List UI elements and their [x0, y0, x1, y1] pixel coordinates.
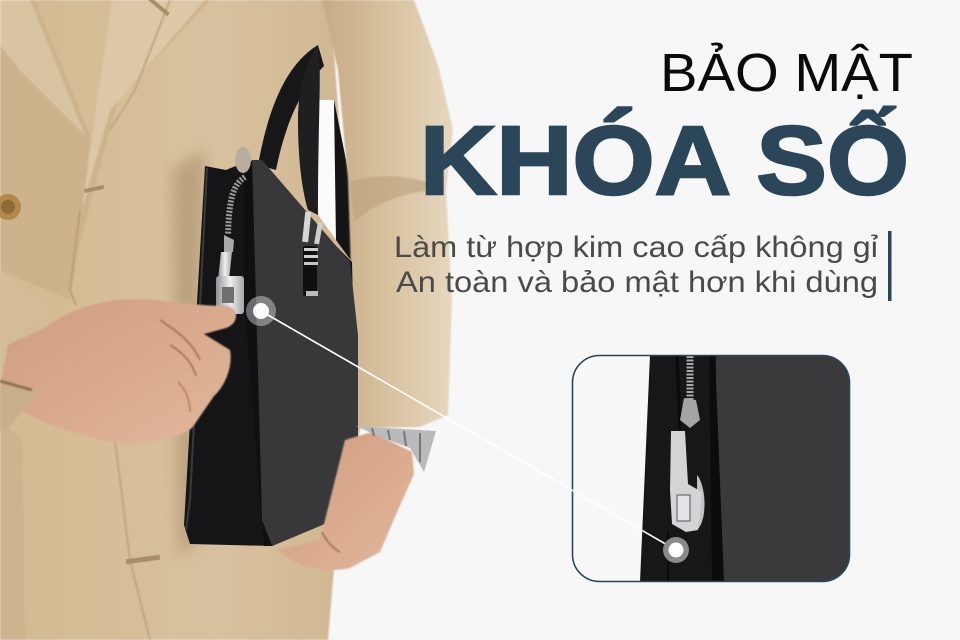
briefcase front panel: [252, 160, 358, 546]
inset: close-up of combination lock: [572, 355, 852, 583]
pointer line connecting bag lock to inset: [261, 311, 676, 550]
watch: [356, 426, 436, 472]
coat toggle behind bag: [235, 147, 251, 173]
accent bar: [888, 231, 892, 301]
zipper: [228, 177, 245, 235]
right hand under bag: [278, 432, 414, 570]
briefcase body: [184, 147, 358, 546]
inset zipper: [686, 356, 694, 400]
marker on bag: [246, 296, 276, 326]
coat sleeve: [322, 0, 453, 428]
zip puller and lock: [216, 235, 244, 314]
coat button: [0, 194, 21, 220]
white gap under handle: [314, 100, 336, 240]
coat shadow behind bag: [172, 150, 205, 555]
photo: man in beige coat holding briefcase: [0, 0, 453, 640]
handle clasp and combination dials: [302, 212, 323, 296]
inset bag side: [640, 355, 720, 582]
description text: [394, 231, 878, 299]
description text: Làm từ hợp kim cao cấp không gỉ: [394, 231, 878, 264]
title: BẢO MẬT: BẢO MẬT: [660, 43, 913, 103]
briefcase handle: [258, 45, 352, 262]
inset bag front panel: [716, 355, 852, 583]
coat body: [0, 0, 360, 640]
title: KHÓA SỐ: KHÓA SỐ: [420, 106, 909, 215]
coat stitching details: [84, 0, 170, 564]
left hand pressing lock: [0, 270, 236, 444]
description text: An toàn và bảo mật hơn khi dùng: [396, 266, 878, 299]
marker on inset: [663, 537, 689, 563]
inset lock: [670, 431, 705, 532]
